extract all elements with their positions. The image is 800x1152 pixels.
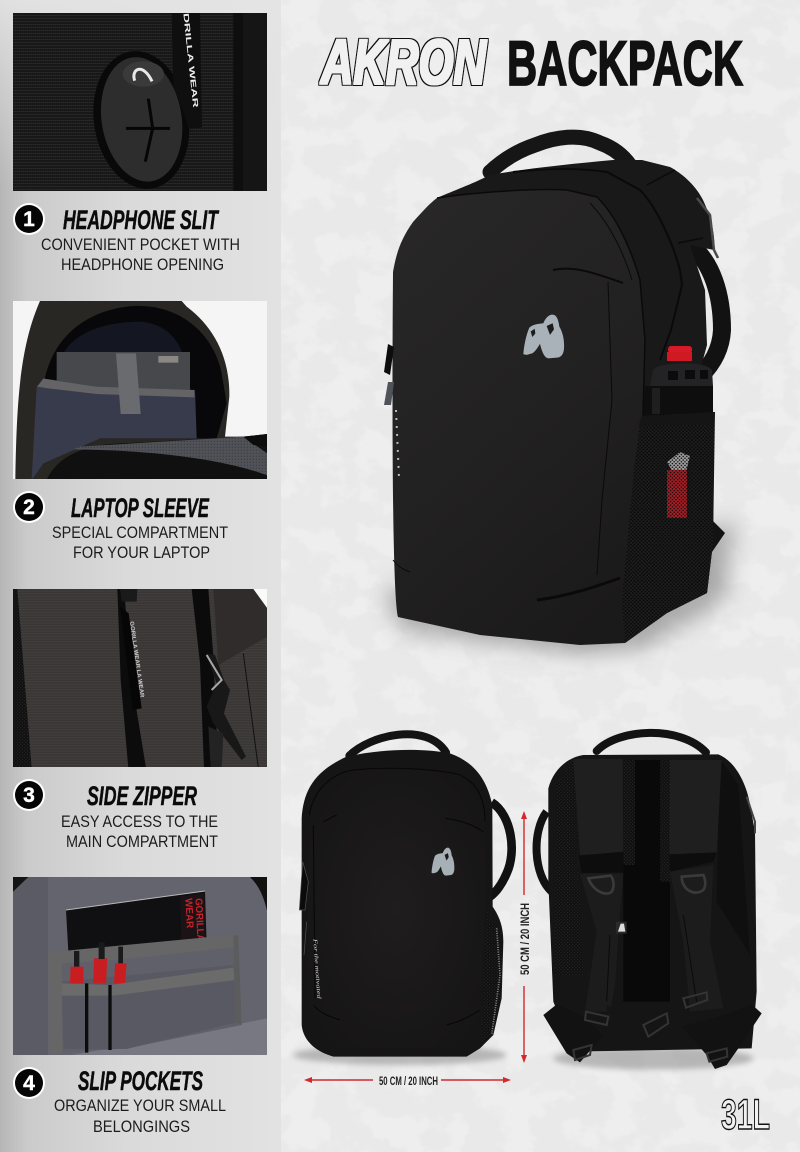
zipper 2 [192, 589, 218, 768]
mesh pocket logo [667, 452, 690, 518]
heading: SLIP POCKETS [78, 1066, 203, 1096]
pocket body [98, 1024, 242, 1050]
capacity label: 31L [721, 1091, 770, 1139]
dimension: height arrow: 50 CM / 20 INCH [520, 903, 532, 975]
photo 1: headphone slit: DRILLA WEAR [181, 13, 200, 109]
shadow [553, 1047, 753, 1070]
title: outlined word: AKRON [320, 26, 487, 98]
laptop [57, 352, 190, 394]
center strap label [616, 922, 627, 934]
sleeve strap [116, 353, 141, 414]
heading: HEADPHONE SLIT [63, 205, 220, 235]
back view backpack [537, 733, 762, 1070]
seams [393, 169, 703, 600]
dimension: width arrow [304, 1076, 511, 1088]
dimension: width arrow: 50 CM / 20 INCH [379, 1076, 438, 1088]
mesh pocket [622, 412, 715, 643]
description: FOR YOUR LAPTOP [73, 543, 210, 562]
number badge 4: 4 [23, 1072, 35, 1095]
pocket lower trim [62, 968, 235, 996]
photo 4: slip pockets [13, 877, 267, 1056]
handle [597, 733, 706, 752]
rear strap tab [712, 520, 725, 552]
top handle [490, 137, 640, 185]
left zipper pulls [384, 344, 399, 478]
water bottle [643, 346, 713, 416]
description: CONVENIENT POCKET WITH [41, 235, 240, 254]
description: EASY ACCESS TO THE [61, 812, 218, 831]
left feature column background [0, 0, 281, 1152]
heading: LAPTOP SLEEVE [71, 493, 210, 523]
dimension: height arrow [520, 811, 532, 1063]
photo 2: laptop sleeve [13, 301, 267, 480]
feature 3 caption [13, 779, 218, 851]
side handle [690, 245, 722, 378]
main backpack, three-quarter view [384, 137, 735, 655]
number badge 2: 2 [23, 496, 35, 519]
body [302, 750, 503, 1057]
zip pull tag [172, 13, 202, 129]
description: SPECIAL COMPARTMENT [52, 523, 228, 542]
number badge 3: 3 [23, 784, 35, 807]
seams [309, 768, 485, 1025]
front panel [393, 190, 645, 645]
magazine: GORILLA [192, 898, 206, 942]
front view backpack [293, 734, 512, 1065]
D rings [588, 875, 705, 894]
lower straps [543, 1004, 603, 1062]
zipper pull [206, 653, 246, 760]
zipper 1 [117, 589, 146, 768]
back and side shell [437, 160, 714, 643]
left zipper [299, 862, 308, 955]
side mesh [482, 912, 502, 1047]
slogan: For the motivated [311, 937, 322, 999]
description: ORGANIZE YOUR SMALL [54, 1096, 226, 1115]
back mesh panels [555, 758, 583, 975]
number badge 2 [13, 491, 45, 523]
right buckle [697, 198, 718, 258]
number badge 1: 1 [23, 208, 35, 231]
logo: gorilla [523, 315, 564, 358]
feature 4 caption [13, 1066, 226, 1136]
right strap [669, 760, 723, 1012]
number badge 4 [13, 1067, 45, 1099]
description: MAIN COMPARTMENT [66, 832, 218, 851]
right buckle [747, 797, 755, 833]
magazine [66, 891, 207, 952]
icon: headphones [134, 69, 152, 81]
number badge 1 [13, 203, 45, 235]
magazine: WEAR [182, 898, 195, 928]
photo 3: side zipper [13, 589, 267, 768]
pocket top trim [62, 937, 206, 989]
side handle [490, 802, 512, 897]
ground shadow [385, 520, 735, 655]
handle [349, 734, 446, 756]
shadow [293, 1045, 507, 1065]
icon: cross slit [126, 99, 170, 162]
left strap [573, 759, 623, 1012]
feature 2 caption [13, 491, 228, 562]
front flap [47, 434, 267, 480]
description: HEADPHONE OPENING [61, 255, 224, 274]
sleeve pocket [32, 378, 197, 480]
description: BELONGINGS [93, 1117, 190, 1136]
heading: SIDE ZIPPER [87, 781, 197, 811]
title [320, 26, 743, 99]
feature 1 caption [13, 203, 240, 274]
logo: gorilla [432, 848, 454, 876]
number badge 3 [13, 779, 45, 811]
buckles [573, 992, 727, 1062]
photo 1: headphone slit [13, 13, 267, 196]
pens [70, 942, 127, 983]
chest strap [607, 1002, 690, 1032]
front panel [307, 768, 485, 1048]
side handle [537, 812, 552, 892]
photo 3: side zipper: GORILLA WEAR LA WEAR [128, 621, 145, 698]
body [548, 754, 757, 1052]
